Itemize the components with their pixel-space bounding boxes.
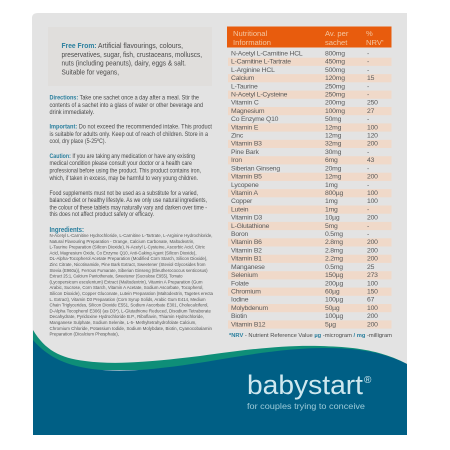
- text block: caution: Caution: If you are taking any medication or have any existing: [50, 153, 195, 160]
- table header: [227, 26, 392, 48]
- row: Magnesium: [231, 108, 265, 115]
- text block: ingredients: Manganese Sulphate, Sodium Selenite, L-5- Methyltetrahydrofolate Calcium,: [50, 320, 196, 325]
- row: 250: [367, 100, 378, 107]
- table header: %: [366, 29, 373, 38]
- text block: important: [50, 124, 212, 145]
- row: L-Taurine: [231, 83, 258, 90]
- text block: ingredients: L. Extract), Vitamin D3 Preparation (Corn Syrup Solids, Arabic Gum E414, Medium: [50, 297, 206, 302]
- table header: Nutritional: [233, 29, 267, 38]
- row: Copper: [231, 198, 253, 205]
- row: 120mg: [325, 75, 345, 82]
- row: [231, 83, 369, 90]
- row: 50mg: [325, 116, 342, 123]
- row: [231, 67, 369, 74]
- row: [228, 271, 392, 279]
- row: -: [367, 83, 369, 90]
- row: Boron: [231, 231, 249, 238]
- row: -: [367, 206, 369, 213]
- row: -: [367, 116, 369, 123]
- row: 200: [367, 247, 378, 254]
- text block: ingredients: Silicon Dioxide), Copper Gluconate, Lutein Preparation (Maltodextrin, Tagetes erecta: [50, 291, 213, 296]
- row: 150µg: [325, 272, 343, 279]
- row: Vitamin B3: [231, 141, 262, 148]
- row: 5µg: [325, 321, 336, 328]
- row: 200: [367, 256, 378, 263]
- row: -: [367, 165, 369, 172]
- text block: ingredients: L-Taurine Preparation (Silicon Dioxide), N-Acetyl L-Cysteine, Ascorbic Acid, Citric: [50, 245, 206, 250]
- row: 12mg: [325, 174, 342, 181]
- row: N-Acetyl L-Cysteine: [231, 91, 288, 98]
- row: 1mg: [325, 206, 338, 213]
- text block: ingredients: Zinc Citrate, Nicotinamide, Pine Bark Extract, Sweetener (Steviol Glycosides from: [50, 262, 206, 267]
- text block: food supplements note: the colour of these tablets may naturally vary and darken over time -: [50, 204, 207, 212]
- panel: free from: Free From: Artificial flavourings, colours,: [62, 41, 183, 50]
- row: 200: [367, 313, 378, 320]
- row: L-Arginine HCL: [231, 67, 275, 74]
- row: [228, 107, 392, 115]
- row: Vitamin B2: [231, 247, 262, 254]
- row: [231, 182, 369, 189]
- row: 2.2mg: [325, 256, 343, 263]
- row: 800µg: [325, 190, 343, 197]
- row: 1mg: [325, 198, 338, 205]
- text block: ingredients: Decahydrate, Pyridoxine Hydrochloride B.P., Riboflavin, Thiamin Hydrochloride,: [50, 314, 204, 319]
- row: 0.5mg: [325, 264, 343, 271]
- row: Iron: [231, 157, 242, 164]
- row: Molybdenum: [231, 305, 268, 312]
- row: Vitamin B5: [231, 174, 262, 181]
- row: [231, 100, 378, 107]
- row: 200: [367, 215, 378, 222]
- row: 60µg: [325, 289, 340, 296]
- row: [231, 165, 369, 172]
- row: [228, 255, 392, 263]
- text block: important: Important: Do not exceed the recommended intake. This product: [50, 124, 212, 130]
- row: 100: [367, 280, 378, 287]
- text block: food supplements note: Food supplements must not be used as a substitute for a varied,: [50, 190, 198, 197]
- row: Chromium: [231, 289, 261, 296]
- row: [231, 297, 375, 304]
- row: [228, 91, 392, 99]
- row: [231, 149, 369, 156]
- row: 200: [367, 141, 378, 148]
- row: N-Acetyl L-Carnitine HCL: [231, 50, 303, 57]
- row: [228, 222, 392, 230]
- row: Manganese: [231, 264, 265, 271]
- row: 12mg: [325, 133, 342, 140]
- row: [228, 320, 392, 329]
- text block: ingredients: [50, 225, 213, 337]
- text block: ingredients: D-Alpha Tocopherol E306) (as D3*), L-Glutathione Reduced, Disodium Tetraborate: [50, 308, 211, 313]
- row: Vitamin B12: [231, 321, 266, 328]
- row: -: [367, 182, 369, 189]
- row: 100: [367, 198, 378, 205]
- row: -: [367, 231, 369, 238]
- row: Pine Bark: [231, 149, 259, 156]
- row: [228, 156, 392, 164]
- row: Vitamin B1: [231, 256, 262, 263]
- footnote: *NRV - Nutrient Reference Value µg -microgram / mg -milligram: [229, 333, 393, 339]
- footer wave: [33, 330, 407, 435]
- row: [228, 304, 392, 312]
- row: [228, 140, 392, 148]
- row: 100µg: [325, 297, 343, 304]
- row: Siberian Ginseng: [231, 165, 280, 172]
- row: Vitamin D3: [231, 215, 263, 222]
- row: 150: [367, 289, 378, 296]
- text block: caution: [49, 153, 201, 182]
- text block: ingredients: Preparation (Dicalcium Phosphate),: [50, 332, 119, 337]
- row: -: [367, 91, 369, 98]
- row: 200: [367, 321, 378, 328]
- row: 250mg: [325, 91, 345, 98]
- text block: directions: drink immediately.: [50, 109, 94, 116]
- text block: ingredients: Chain Triglycerides, Silicon Dioxide E551, Sodium Ascorbate E301, Cholecalciferol,: [50, 303, 208, 308]
- row: 250mg: [325, 83, 345, 90]
- text block: ingredients: DL-Alpha-Tocopherol Acetate Preparation (Modified Corn Starch, Silicon Dioxide),: [50, 256, 208, 261]
- panel: free from: [48, 27, 212, 86]
- text block: food supplements note: balanced diet or healthy lifestyle. As we only use natural ingredients,: [50, 197, 207, 204]
- text block: caution: professional before using the product. This product contains iron,: [50, 168, 201, 174]
- row: Vitamin B6: [231, 239, 262, 246]
- row: 800mg: [325, 50, 345, 57]
- row: 0.5mg: [325, 231, 343, 238]
- row: Selenium: [231, 272, 258, 279]
- text block: ingredients: N-Acetyl L-Carnitine Hydrochloride, L-Carnitine L-Tartrate, L-Arginine Hydrochloride,: [50, 233, 212, 238]
- row: [231, 132, 378, 140]
- text block: ingredients: Acid, Magnesium Oxide, Co Enzyme Q10, Anti-Caking Agent (Silicon Dioxide),: [50, 250, 196, 255]
- row: 10µg: [325, 215, 340, 222]
- row: 200: [367, 174, 378, 181]
- row: Vitamin E: [231, 124, 259, 131]
- table header: sachet: [325, 38, 348, 47]
- row: 120: [367, 133, 378, 140]
- row: Lutein: [231, 206, 249, 213]
- row: 12mg: [325, 124, 342, 131]
- row: 200: [367, 239, 378, 246]
- text block: food supplements note: [50, 190, 207, 218]
- row: L-Carnitine L-Tartrate: [231, 59, 291, 66]
- row: -: [367, 67, 369, 74]
- row: Biotin: [231, 313, 247, 320]
- row: [231, 50, 369, 57]
- text block: important: is suitable for adults only. Keep out of reach of children. Store in a: [50, 131, 208, 138]
- table header: *: [382, 39, 384, 44]
- row: 100: [367, 124, 378, 131]
- text block: ingredients: (Lycopersicum esculentum) Extract (Maltodextrin), Vitamin A Preparation (Gum: [50, 279, 203, 284]
- row: Lycopene: [231, 182, 259, 189]
- row: Vitamin A: [231, 190, 258, 197]
- row: 200mg: [325, 100, 345, 107]
- row: [231, 264, 375, 271]
- text block: food supplements note: this does not affect product safety or efficacy.: [50, 211, 154, 218]
- row: 27: [367, 108, 375, 115]
- package panel background: [32, 13, 407, 435]
- row: 20mg: [325, 165, 342, 172]
- row: [228, 206, 392, 214]
- row: Zinc: [231, 133, 244, 140]
- row: [231, 116, 369, 123]
- row: 15: [367, 75, 375, 82]
- row: 2.8mg: [325, 239, 343, 246]
- row: 100µg: [325, 313, 343, 320]
- row: Iodine: [231, 297, 249, 304]
- text block: ingredients: Ingredients:: [50, 225, 84, 234]
- table header: Information: [233, 38, 271, 47]
- row: [228, 58, 392, 66]
- row: [228, 74, 392, 82]
- text block: directions: Directions: Take one sachet once a day after a meal. Stir the: [50, 94, 199, 102]
- row: 6mg: [325, 157, 338, 164]
- row: 500mg: [325, 67, 345, 74]
- row: -: [367, 223, 369, 230]
- row: 25: [367, 264, 375, 271]
- text block: caution: which, if taken in excess, may be harmful to very young children.: [49, 175, 198, 182]
- row: 200µg: [325, 280, 343, 287]
- row: Calcium: [231, 75, 255, 82]
- row: [228, 288, 392, 296]
- text block: ingredients: Extract 25:1, Calcium Pantothenate, Sweetener (Sucralose E955), Tomato: [50, 274, 183, 279]
- row: L-Glutathione: [231, 223, 270, 230]
- row: [231, 280, 378, 287]
- row: 100mg: [325, 108, 345, 115]
- row: Folate: [231, 280, 249, 287]
- text block: ingredients: Chromium Chloride, Potassium Iodide, Sodium Molybdate, Biotin, Cyanocobalamin: [50, 326, 212, 331]
- panel: free from: Suitable for vegans,: [62, 68, 119, 76]
- row: 100: [367, 190, 378, 197]
- row: [231, 198, 378, 205]
- panel: free from: preservatives, sugar, fish, crustaceans, molluscs,: [62, 50, 202, 59]
- nutrition table: [228, 50, 392, 329]
- row: 100: [367, 305, 378, 312]
- text block: ingredients: Stevia (E960a)), Ferrous Fumarate, Siberian Ginseng (Eleutherococcus senticosus): [50, 268, 208, 273]
- text block: important: cool, dry place (5-25ºC).: [50, 138, 106, 145]
- row: Co Enzyme Q10: [231, 116, 279, 123]
- table header: Av. per: [325, 29, 349, 38]
- row: 50µg: [325, 305, 340, 312]
- text block: ingredients: Natural Flavouring Preparation - Orange, Calcium Carbonate, Maltodextrin,: [50, 239, 194, 244]
- row: 43: [367, 157, 375, 164]
- table header: NRV: [366, 38, 382, 47]
- text block: caution: medical condition please consult your doctor or a health care: [50, 160, 192, 167]
- row: 32mg: [325, 141, 342, 148]
- row: [228, 123, 392, 132]
- row: Vitamin C: [231, 100, 259, 107]
- row: [231, 215, 378, 222]
- text block: directions: contents of a sachet into a glass of water or other beverage and: [50, 102, 203, 109]
- brand logo: babystart: [247, 370, 364, 400]
- brand logo: ®: [364, 375, 372, 386]
- row: [231, 313, 378, 320]
- row: [228, 238, 392, 246]
- row: [228, 189, 392, 197]
- row: 5mg: [325, 223, 338, 230]
- row: -: [367, 59, 369, 66]
- row: 450mg: [325, 59, 345, 66]
- row: [228, 173, 392, 181]
- row: [231, 247, 378, 254]
- row: 273: [367, 272, 378, 279]
- row: 30mg: [325, 149, 342, 156]
- row: -: [367, 50, 369, 57]
- panel: free from: nuts (including peanuts), dairy, eggs & salt.: [62, 58, 186, 68]
- text block: ingredients: Arabic, Sucrose, Corn Starch, Vitamin A Acetate, Sodium Ascorbate, Tocopherol,: [50, 285, 204, 290]
- row: 1mg: [325, 182, 338, 189]
- row: [231, 231, 369, 238]
- row: 67: [367, 297, 375, 304]
- tagline: for couples trying to conceive: [247, 401, 365, 411]
- row: 2.8mg: [325, 247, 343, 254]
- text block: directions: [50, 94, 203, 116]
- row: -: [367, 149, 369, 156]
